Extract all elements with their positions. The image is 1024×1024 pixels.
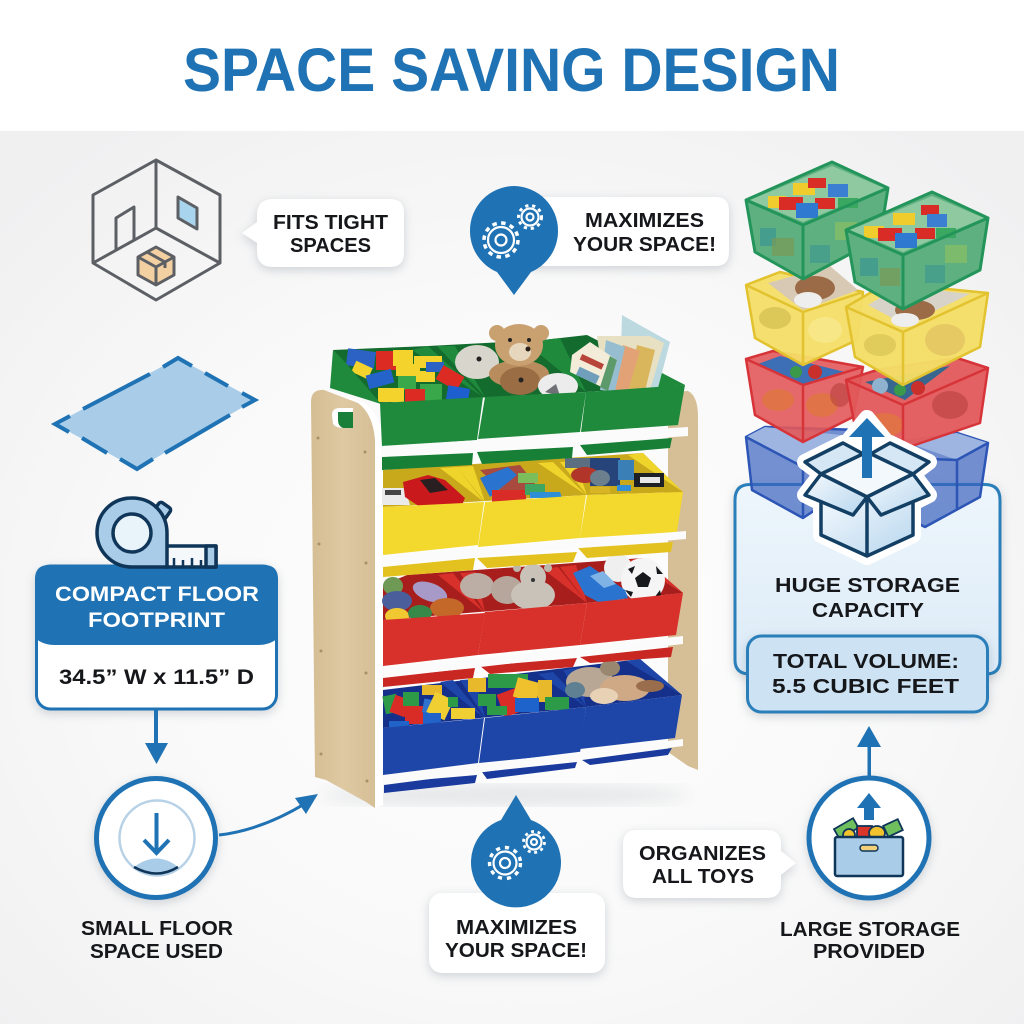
bins: green row xyxy=(330,315,688,470)
toys: blocks xyxy=(346,348,470,403)
arrow: card to circle xyxy=(145,709,168,764)
stat box: total volume: 5.5 CUBIC FEET xyxy=(772,675,960,698)
left side panel xyxy=(311,390,383,808)
stat box: total volume: TOTAL VOLUME: xyxy=(773,650,959,673)
arrow: circle to storage xyxy=(857,726,881,778)
label: large storage provided: PROVIDED xyxy=(813,940,925,963)
callout: fits tight spaces xyxy=(242,199,404,267)
icon: small floor space circle xyxy=(96,778,216,898)
callout: maximizes your space top: YOUR SPACE! xyxy=(573,233,716,256)
callout: maximizes your space top: MAXIMIZES xyxy=(585,209,704,232)
bins: yellow row xyxy=(382,453,686,577)
arrow: circle to shelf xyxy=(219,794,318,835)
stacked translucent bins left xyxy=(746,162,888,518)
panel: compact floor footprint: 34.5” W x 11.5” D xyxy=(59,666,254,689)
panel: huge storage capacity xyxy=(735,484,1000,674)
callout: organizes all toys: ALL TOYS xyxy=(652,865,754,888)
icon: floor footprint xyxy=(55,358,255,469)
label: small floor space used: SMALL FLOOR xyxy=(81,917,233,940)
stat box: total volume xyxy=(748,636,988,712)
title: SPACE SAVING DESIGN xyxy=(183,36,840,104)
toys: plush bears and ball xyxy=(455,324,578,399)
panel: compact floor footprint: FOOTPRINT xyxy=(88,609,225,632)
callout: maximizes your space bottom: MAXIMIZES xyxy=(456,916,577,939)
callout: maximizes your space top xyxy=(470,186,729,295)
label: small floor space used: SPACE USED xyxy=(90,940,223,963)
panel: compact floor footprint: COMPACT FLOOR xyxy=(55,583,259,606)
bins: red row xyxy=(382,554,683,687)
icon: open box with arrow xyxy=(805,418,929,557)
right side panel xyxy=(668,391,698,770)
callout: fits tight spaces: FITS TIGHT xyxy=(273,211,388,234)
callout: organizes all toys xyxy=(623,830,796,898)
product: toy organizer shelf xyxy=(311,315,698,808)
stacked translucent bins right xyxy=(846,192,988,527)
callout: maximizes your space bottom: YOUR SPACE! xyxy=(445,939,587,962)
bins: blue row xyxy=(382,659,683,793)
toys: books xyxy=(570,315,670,391)
label: large storage provided: LARGE STORAGE xyxy=(780,918,960,941)
callout: fits tight spaces: SPACES xyxy=(290,234,371,257)
icon: isometric room xyxy=(93,160,220,300)
callout: organizes all toys: ORGANIZES xyxy=(639,842,766,865)
text: huge storage capacity xyxy=(775,574,960,622)
label: large storage provided xyxy=(780,918,960,963)
label: small floor space used xyxy=(81,917,233,963)
panel: compact floor footprint xyxy=(35,565,278,709)
callout: maximizes your space bottom xyxy=(429,795,605,973)
text: huge storage capacity: CAPACITY xyxy=(812,599,924,622)
icon: large storage circle xyxy=(809,778,929,898)
icon: tape measure xyxy=(97,498,216,567)
text: huge storage capacity: HUGE STORAGE xyxy=(775,574,960,597)
